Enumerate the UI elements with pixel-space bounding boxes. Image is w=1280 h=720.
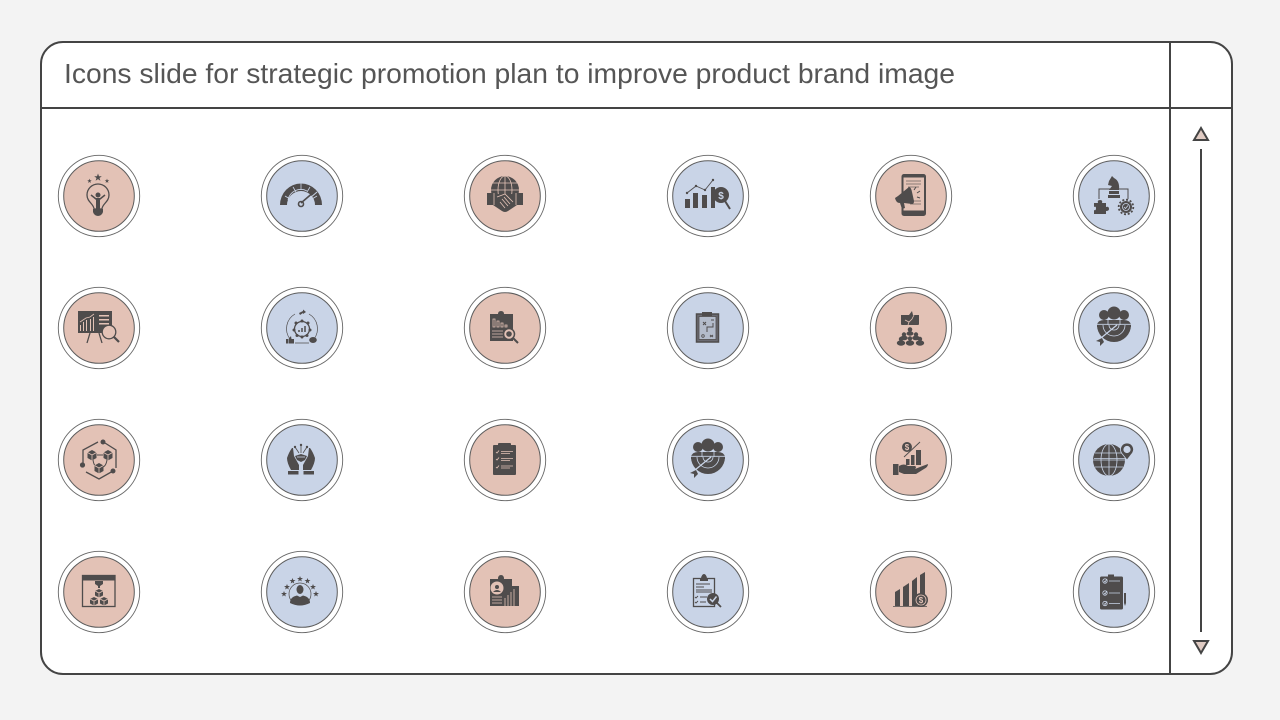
badge: window with 3D printed cubes <box>58 551 140 633</box>
icon: presentation board <box>78 311 119 343</box>
icon: audience pyramid <box>897 311 924 346</box>
icon: gear cycle <box>286 310 317 344</box>
badge: task list with pen <box>1073 551 1155 633</box>
icon: globe with pin <box>1093 443 1134 476</box>
icon: report clipboard <box>490 311 518 343</box>
icon: rated person <box>281 576 319 606</box>
icon: approved clipboard <box>694 574 721 607</box>
scroll track <box>1200 149 1202 632</box>
icon: target audience <box>690 438 726 478</box>
badge: person with rating stars <box>261 551 343 633</box>
badge: hands holding open box <box>261 419 343 501</box>
badge: chess, puzzle and gear <box>1073 155 1155 237</box>
icon: chess strategy <box>1094 176 1133 214</box>
badge: phone with megaphone <box>870 155 952 237</box>
icon: chart with magnifier: $ <box>718 191 724 202</box>
badge: clipboard profile with bar chart <box>464 551 546 633</box>
arrow: scroll down <box>1194 641 1208 653</box>
icon: profile clipboard <box>490 575 519 606</box>
badge: tactics clipboard <box>667 287 749 369</box>
badge: bar chart and dollar magnifier <box>667 155 749 237</box>
scrollbar <box>1194 128 1208 653</box>
badge: product network hexagon <box>58 419 140 501</box>
badge: presentation board with magnifier <box>58 287 140 369</box>
badge: clipboard with report magnifier <box>464 287 546 369</box>
badge: advertising to audience pyramid <box>870 287 952 369</box>
badge: target audience 2 <box>667 419 749 501</box>
icon: hands with box <box>287 444 315 474</box>
badge: rising bars with coin <box>870 551 952 633</box>
icon: target audience <box>1096 306 1132 346</box>
badge: hand with growth and coin <box>870 419 952 501</box>
icon: gauge <box>280 183 322 206</box>
badge: checklist clipboard <box>464 419 546 501</box>
icon: phone with megaphone <box>895 174 926 216</box>
icon: lightbulb <box>87 174 109 216</box>
icon: task list with pen <box>1100 574 1126 610</box>
badge: handshake globe <box>464 155 546 237</box>
badge: gear cycle with chart <box>261 287 343 369</box>
badge: clipboard with approved check <box>667 551 749 633</box>
icon: tactics clipboard <box>696 312 718 342</box>
icon: checklist clipboard <box>493 443 516 475</box>
icon: product network <box>80 440 116 479</box>
badge: globe with location pin <box>1073 419 1155 501</box>
icon: hand with growth chart: $ <box>905 443 910 452</box>
title: Icons slide for strategic promotion plan to improve product brand image <box>64 58 955 89</box>
arrow: scroll up <box>1194 128 1208 140</box>
badge: target audience <box>1073 287 1155 369</box>
badge: lightbulb with person <box>58 155 140 237</box>
icon: window with cubes <box>82 575 116 606</box>
icon: rising bars with coin: $ <box>919 596 924 605</box>
badge: gauge <box>261 155 343 237</box>
icon: handshake globe <box>487 176 523 212</box>
